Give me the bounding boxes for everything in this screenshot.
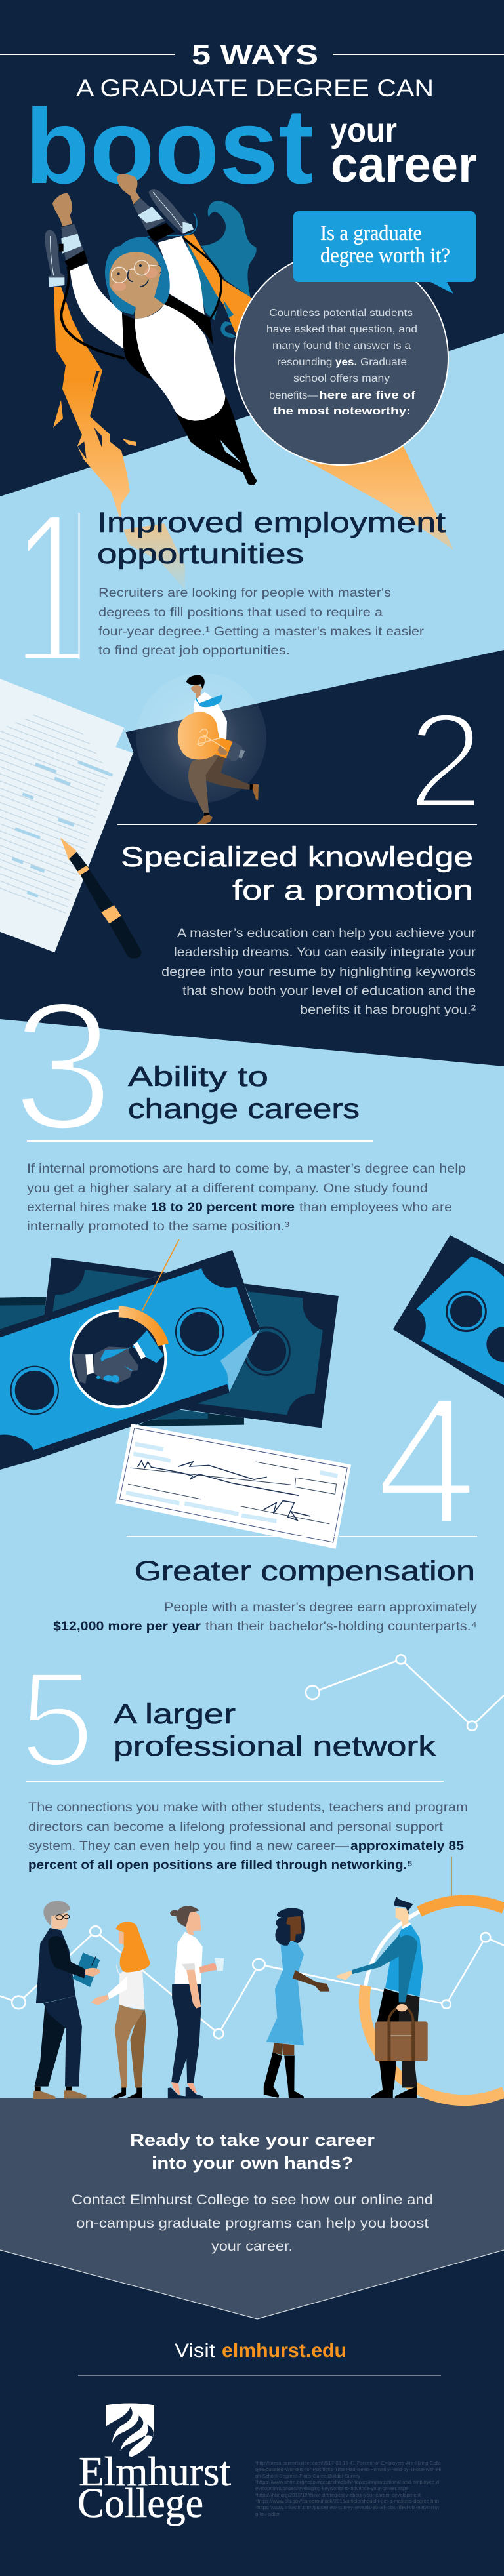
illustration: signed cheque bbox=[116, 1424, 351, 1549]
footnotes: gh-School-Degrees-Finds-CareerBuilder-Survey bbox=[255, 2473, 360, 2479]
section 3: ability to change careers: Ability to bbox=[128, 1061, 268, 1093]
cta panel bbox=[0, 2098, 504, 2319]
intro circle bbox=[234, 251, 448, 465]
person: grey-haired man with folder bbox=[33, 1901, 100, 2099]
section 5: a larger professional network: percent of all open positions are filled through networking. ⁵ bbox=[28, 1859, 413, 1872]
visit link: Visit bbox=[175, 2340, 216, 2362]
footnotes bbox=[255, 2460, 441, 2517]
section 3: ability to change careers: 18 to 20 percent more bbox=[151, 1201, 295, 1215]
cta panel: Contact Elmhurst College to see how our online and bbox=[72, 2192, 433, 2207]
speech bubble: degree worth it? bbox=[320, 244, 450, 268]
intro circle: the most noteworthy: bbox=[273, 405, 411, 417]
illustration: document and pen bbox=[0, 679, 142, 959]
section 5: a larger professional network: The connections you make with other students, teachers and program bbox=[28, 1801, 468, 1815]
section 5: a larger professional network: system. They can even help you find a new career— bbox=[28, 1840, 349, 1853]
person: man with bag bbox=[336, 1897, 428, 2098]
footnotes: ¹http://press.careerbuilder.com/2017-03-16-41-Percent-of-Employers-Are-Hiring-Colle bbox=[255, 2460, 441, 2466]
icon: shield bbox=[106, 2403, 154, 2457]
section 4: greater compensation bbox=[53, 1537, 478, 1634]
blue flowing hair behind flames bbox=[186, 201, 257, 338]
section 3: ability to change careers: If internal promotions are hard to come by, a master’s degree can help bbox=[27, 1162, 466, 1176]
cta panel: into your own hands? bbox=[152, 2153, 353, 2173]
section 4: greater compensation: than their bachelor's-holding counterparts.⁴ bbox=[205, 1620, 477, 1634]
numeral 5: 5 bbox=[19, 1643, 95, 1796]
section 1: improved employment opportunities: degrees to fill positions that used to require a bbox=[98, 606, 383, 620]
section 3: ability to change careers: you get a higher salary at a different company. One study found bbox=[27, 1182, 428, 1196]
intro circle: here are five of bbox=[319, 389, 415, 401]
illustration: bill at right edge bbox=[393, 1235, 504, 1398]
section 5: a larger professional network bbox=[26, 1699, 468, 1872]
footnotes: ⁵https://www.linkedin.com/pulse/new-survey-reveals-85-all-jobs-filled-via-networkin bbox=[255, 2505, 439, 2510]
section 1: improved employment opportunities bbox=[79, 507, 446, 659]
intro circle: benefits— bbox=[269, 390, 318, 401]
illustration: networking people bbox=[33, 1897, 428, 2099]
title: career bbox=[331, 137, 477, 193]
title: A GRADUATE DEGREE CAN bbox=[76, 75, 434, 102]
footnotes: ²https://www.shrm.org/resourcesandtools/hr-topics/organizational-and-employee-d bbox=[255, 2479, 439, 2485]
illustration: dollar bills and handshake bbox=[0, 1239, 339, 1470]
section 3: ability to change careers: external hires make bbox=[27, 1201, 147, 1215]
footnotes: ³https://hbr.org/2016/12/think-strategically-about-your-career-development bbox=[255, 2492, 421, 2498]
footnotes: ge-Educated-Workers-for-Positions-That-Had-Been-Primarily-Held-by-Those-with-Hi bbox=[255, 2466, 441, 2472]
footnotes: evelopment/pages/leveraging-keywords-to-advance-your-career.aspx bbox=[255, 2485, 408, 2491]
section 3: ability to change careers bbox=[27, 1061, 466, 1234]
section 5: a larger professional network: approximately 85 bbox=[350, 1840, 464, 1853]
visit link bbox=[78, 2340, 441, 2375]
person: woman in blue dress bbox=[264, 1908, 329, 2098]
section 2: specialized knowledge: leadership dreams. You can easily integrate your bbox=[174, 946, 476, 959]
intro circle: resounding yes. Graduate bbox=[277, 357, 407, 368]
orange ring behind people bbox=[364, 1857, 504, 2101]
title: boost bbox=[25, 87, 314, 206]
section 2: specialized knowledge: Specialized knowledge bbox=[121, 841, 473, 873]
section 2: specialized knowledge: degree into your resume by highlighting keywords bbox=[161, 965, 476, 979]
intro circle: many found the answer is a bbox=[272, 340, 411, 352]
section 2: specialized knowledge: benefits it has brought you.² bbox=[300, 1003, 476, 1017]
numeral 2: 2 bbox=[408, 685, 484, 837]
person: woman with orange hair bbox=[91, 1922, 150, 2098]
section 1: improved employment opportunities: Improved employment bbox=[97, 507, 446, 538]
network line chart decoration bbox=[0, 1655, 504, 2038]
section 2: specialized knowledge: A master’s education can help you achieve your bbox=[177, 927, 476, 940]
section 3: ability to change careers: internally promoted to the same position.³ bbox=[27, 1220, 289, 1234]
footnotes: g-lou-adler bbox=[255, 2511, 280, 2517]
section 4: greater compensation: $12,000 more per year bbox=[53, 1620, 201, 1634]
section 1: improved employment opportunities: opportunities bbox=[97, 538, 304, 570]
intro circle: school offers many bbox=[293, 373, 390, 384]
section 3: ability to change careers: change careers bbox=[128, 1093, 360, 1125]
title bbox=[0, 39, 504, 206]
wordmark: Elmhurst bbox=[79, 2448, 231, 2495]
speech bubble: Is a graduate bbox=[320, 222, 422, 245]
intro circle: have asked that question, and bbox=[266, 324, 417, 335]
numeral 1: 1 bbox=[12, 466, 93, 715]
visit link: elmhurst.edu bbox=[222, 2340, 346, 2362]
intro circle: Countless potential students bbox=[269, 308, 413, 319]
speech bubble bbox=[293, 211, 476, 294]
section 4: greater compensation: Greater compensation bbox=[135, 1556, 475, 1587]
section 4: greater compensation: People with a master's degree earn approximately bbox=[164, 1601, 478, 1615]
title: your bbox=[330, 111, 397, 150]
rocket flames bbox=[53, 234, 453, 590]
section 5: a larger professional network: A larger bbox=[114, 1699, 236, 1730]
section 1: improved employment opportunities: to find great job opportunities. bbox=[98, 644, 290, 658]
illustration: man carrying light bulb bbox=[136, 673, 266, 824]
section 1: improved employment opportunities: Recruiters are looking for people with master's bbox=[98, 586, 391, 600]
title: 5 WAYS bbox=[192, 39, 318, 71]
section 3: ability to change careers: than employees who are bbox=[299, 1201, 452, 1215]
numeral 3 bbox=[21, 1004, 104, 1128]
logo: Elmhurst College: College bbox=[77, 2480, 203, 2526]
illustration: jetpack student bbox=[45, 174, 257, 485]
cta panel: Ready to take your career bbox=[130, 2130, 375, 2150]
person: woman with glass bbox=[168, 1906, 224, 2098]
section 2: specialized knowledge: that show both your level of education and the bbox=[182, 984, 476, 998]
section 1: improved employment opportunities: four-year degree.¹ Getting a master's makes it easier bbox=[98, 625, 425, 639]
numeral 4: 4 bbox=[375, 1359, 478, 1563]
section 5: a larger professional network: professional network bbox=[114, 1731, 436, 1762]
cta panel: on-campus graduate programs can help you boost bbox=[76, 2216, 429, 2231]
numeral 3: 3 bbox=[12, 964, 114, 1169]
logo: Elmhurst College bbox=[77, 2403, 231, 2526]
section 2: specialized knowledge: for a promotion bbox=[232, 875, 473, 906]
section 5: a larger professional network: directors can become a lifelong professional and personal support bbox=[28, 1821, 444, 1834]
section 2: specialized knowledge bbox=[117, 824, 477, 1017]
footnotes: ⁴https://www.bls.gov/careeroutlook/2015/article/should-i-get-a-masters-degree.htm bbox=[255, 2498, 439, 2504]
numeral 3: 3 bbox=[12, 964, 114, 1169]
cta panel: your career. bbox=[211, 2239, 293, 2254]
